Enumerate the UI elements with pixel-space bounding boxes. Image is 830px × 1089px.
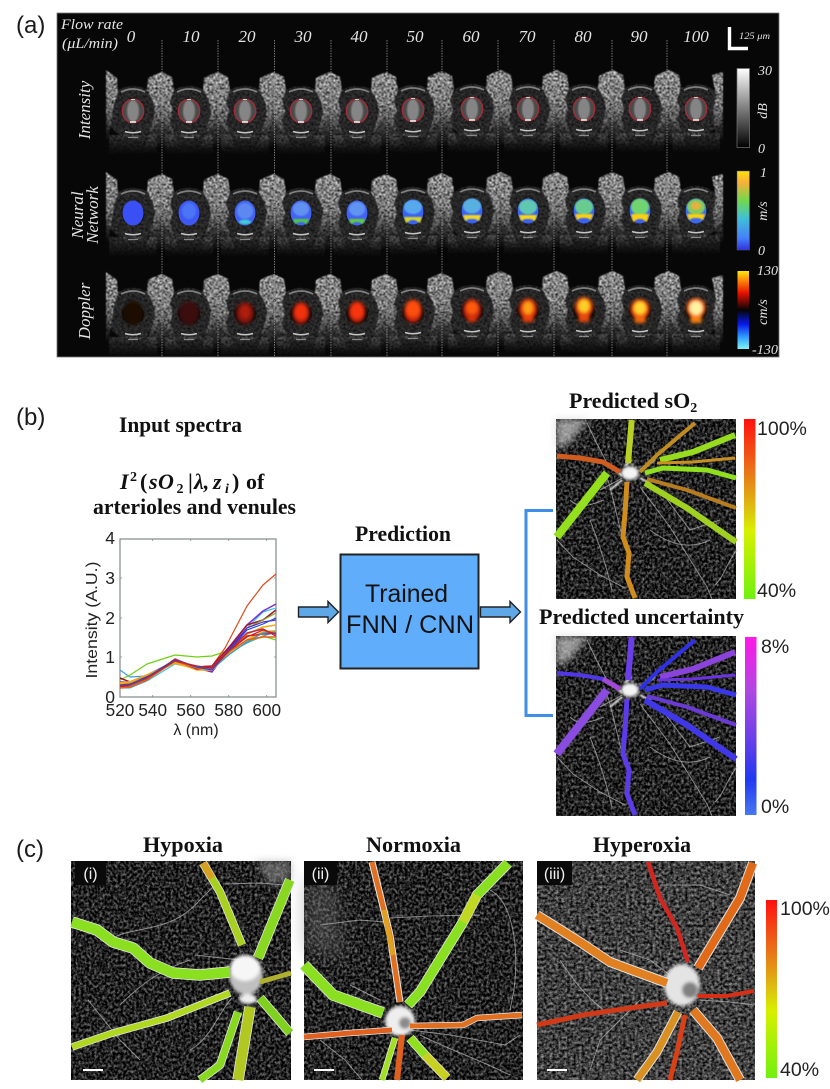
x axis tick labels: 560 (176, 700, 205, 720)
colorbar: doppler cm/s (738, 264, 778, 358)
flow rate column values: 70 (518, 27, 536, 46)
colorbar: uncertainty: 0% (761, 796, 789, 818)
heading: Input spectra: Input spectra (119, 412, 242, 437)
bracket connecting outputs (526, 510, 553, 716)
panel label: (b): (b) (16, 404, 45, 431)
chart: input spectra line plot (84, 528, 281, 739)
retina image (ii): normoxia (304, 861, 523, 1080)
x axis tick labels: 580 (214, 700, 243, 720)
panel background (57, 13, 779, 357)
flow rate column values: 90 (630, 27, 648, 46)
colorbar: panel c sO2: 100% (780, 898, 830, 920)
heading: Hyperoxia: Hyperoxia (593, 832, 691, 857)
colorbar: neural network m/s: 0 (758, 244, 765, 259)
colorbar: neural network m/s (737, 166, 771, 259)
spectra curves (120, 574, 276, 688)
optic disc (664, 964, 700, 1006)
background vessels (320, 890, 520, 1080)
optic disc (385, 1006, 415, 1036)
formula heading: of (246, 469, 265, 494)
uncertainty vessels (557, 637, 736, 815)
box: trained network (340, 554, 478, 668)
row label: Neural Network (68, 186, 102, 245)
row label: Intensity: Intensity (75, 80, 94, 140)
x axis tick labels (106, 700, 281, 720)
box: trained network: FNN / CNN (346, 611, 474, 639)
plot frame and ticks (120, 539, 276, 697)
oxygenation vessels (72, 863, 291, 1080)
y axis tick labels: 3 (105, 568, 115, 588)
flow rate column values: 60 (462, 27, 480, 46)
flow rate header: (μL/min) (62, 36, 118, 52)
formula heading: 2 (130, 470, 137, 485)
doppler row velocity maps (123, 297, 706, 325)
dotted column separators (162, 40, 667, 357)
formula heading: ) (232, 469, 239, 494)
oxygenation vessels (304, 862, 522, 1080)
oxygenation vessels (537, 862, 754, 1080)
y axis tick labels (105, 528, 115, 707)
y axis tick labels: 4 (105, 528, 115, 548)
halo (537, 863, 753, 1080)
flow rate column values: 100 (683, 27, 709, 46)
colorbar: sO2 (744, 418, 807, 602)
colorbar: doppler cm/s: cm/s (756, 299, 771, 325)
formula heading: λ, (193, 469, 209, 494)
flow rate column values: 50 (406, 27, 424, 46)
retina map: predicted sO2 (556, 419, 737, 599)
colorbar: doppler cm/s: -130 (752, 343, 778, 358)
speckle tissue tiles (106, 70, 723, 357)
x axis tick labels: 520 (106, 700, 134, 720)
box: trained network: Trained (365, 580, 448, 608)
row label: Neural Network: Network (83, 186, 102, 245)
formula heading: O (158, 469, 174, 494)
ring arcs (121, 87, 708, 340)
y axis tick labels: 2 (105, 608, 115, 628)
label chip (537, 861, 572, 885)
background vessels (560, 885, 755, 1070)
formula heading: s (148, 469, 158, 494)
retina image (i): hypoxia (71, 861, 291, 1080)
arrow: spectra to network (298, 602, 338, 622)
heading: Predicted uncertainty: Predicted uncertainty (539, 604, 744, 629)
heading: Predicted sO2: Predicted sO (569, 388, 690, 413)
colorbar: sO2: 40% (757, 580, 796, 602)
heading: Predicted sO2: 2 (690, 401, 697, 416)
colorbar: panel c sO2: 40% (780, 1059, 819, 1081)
colorbar: sO2: 100% (757, 418, 807, 440)
heading: arterioles and venules: arterioles and venules (93, 494, 296, 519)
label chip (75, 861, 106, 885)
colorbar: intensity dB (737, 64, 772, 157)
neural network row velocity maps (122, 198, 706, 226)
background vessels (88, 883, 285, 1060)
colorbar: doppler cm/s: 130 (757, 264, 778, 279)
x axis title: λ (nm) (173, 722, 219, 739)
y axis title: Intensity (A.U.) (84, 562, 101, 678)
scale bar (314, 1069, 334, 1071)
formula heading: | (188, 469, 193, 494)
colorbar: intensity dB: 0 (758, 142, 765, 157)
formula heading: ( (140, 469, 147, 494)
flow rate column values: 10 (182, 27, 200, 46)
heading: Normoxia: Normoxia (366, 832, 461, 857)
halo (72, 863, 290, 1080)
row label: Doppler: Doppler (75, 282, 94, 340)
scale bar (547, 1069, 567, 1071)
label chip (304, 861, 337, 885)
panel: flow phantom image grid (57, 13, 779, 358)
flow rate column values: 40 (350, 27, 368, 46)
row label: Neural Network: Neural (68, 191, 87, 240)
panel label: (c): (c) (16, 836, 44, 863)
arrow: network to outputs (480, 602, 520, 622)
formula heading: I (119, 469, 130, 494)
flow rate column values (127, 27, 709, 46)
colorbar: neural network m/s: 1 (760, 166, 767, 181)
retina image (iii): hyperoxia (537, 861, 755, 1080)
flow rate header (60, 17, 123, 52)
scale bar: 125 um: 125 μm (739, 32, 770, 42)
flow rate column values: 0 (127, 27, 136, 46)
colorbar: uncertainty: 8% (761, 636, 789, 658)
colorbar: intensity dB: 30 (757, 64, 772, 79)
scale bar (83, 1069, 103, 1071)
colorbar: neural network m/s: m/s (756, 201, 771, 221)
label chip: (ii) (312, 866, 329, 883)
x axis tick labels: 540 (138, 700, 167, 720)
flow rate column values: 80 (574, 27, 592, 46)
sO2 vessels (557, 420, 736, 598)
heading: Prediction: Prediction (355, 521, 451, 546)
label chip: (i) (83, 866, 98, 883)
scale bar: 125 um (730, 27, 770, 48)
optic disc (229, 955, 263, 1004)
flow rate header: Flow rate (60, 17, 123, 33)
y axis tick labels: 0 (105, 687, 115, 707)
formula heading: 2 (176, 482, 184, 497)
colorbar: panel c sO2 (766, 898, 830, 1081)
flow rate column values: 20 (238, 27, 256, 46)
halo (304, 862, 522, 1080)
retina map: predicted uncertainty (556, 636, 737, 816)
formula heading: z (212, 469, 222, 494)
formula heading: i (225, 482, 229, 497)
x axis tick labels: 600 (252, 700, 281, 720)
panel label: (a): (a) (16, 12, 45, 39)
heading: Hypoxia: Hypoxia (143, 832, 223, 857)
label chip: (iii) (544, 866, 565, 883)
colorbar: uncertainty (745, 636, 789, 818)
flow rate column values: 30 (294, 27, 312, 46)
y axis tick labels: 1 (105, 647, 115, 667)
intensity row lumens (122, 97, 707, 123)
colorbar: intensity dB: dB (756, 103, 771, 119)
